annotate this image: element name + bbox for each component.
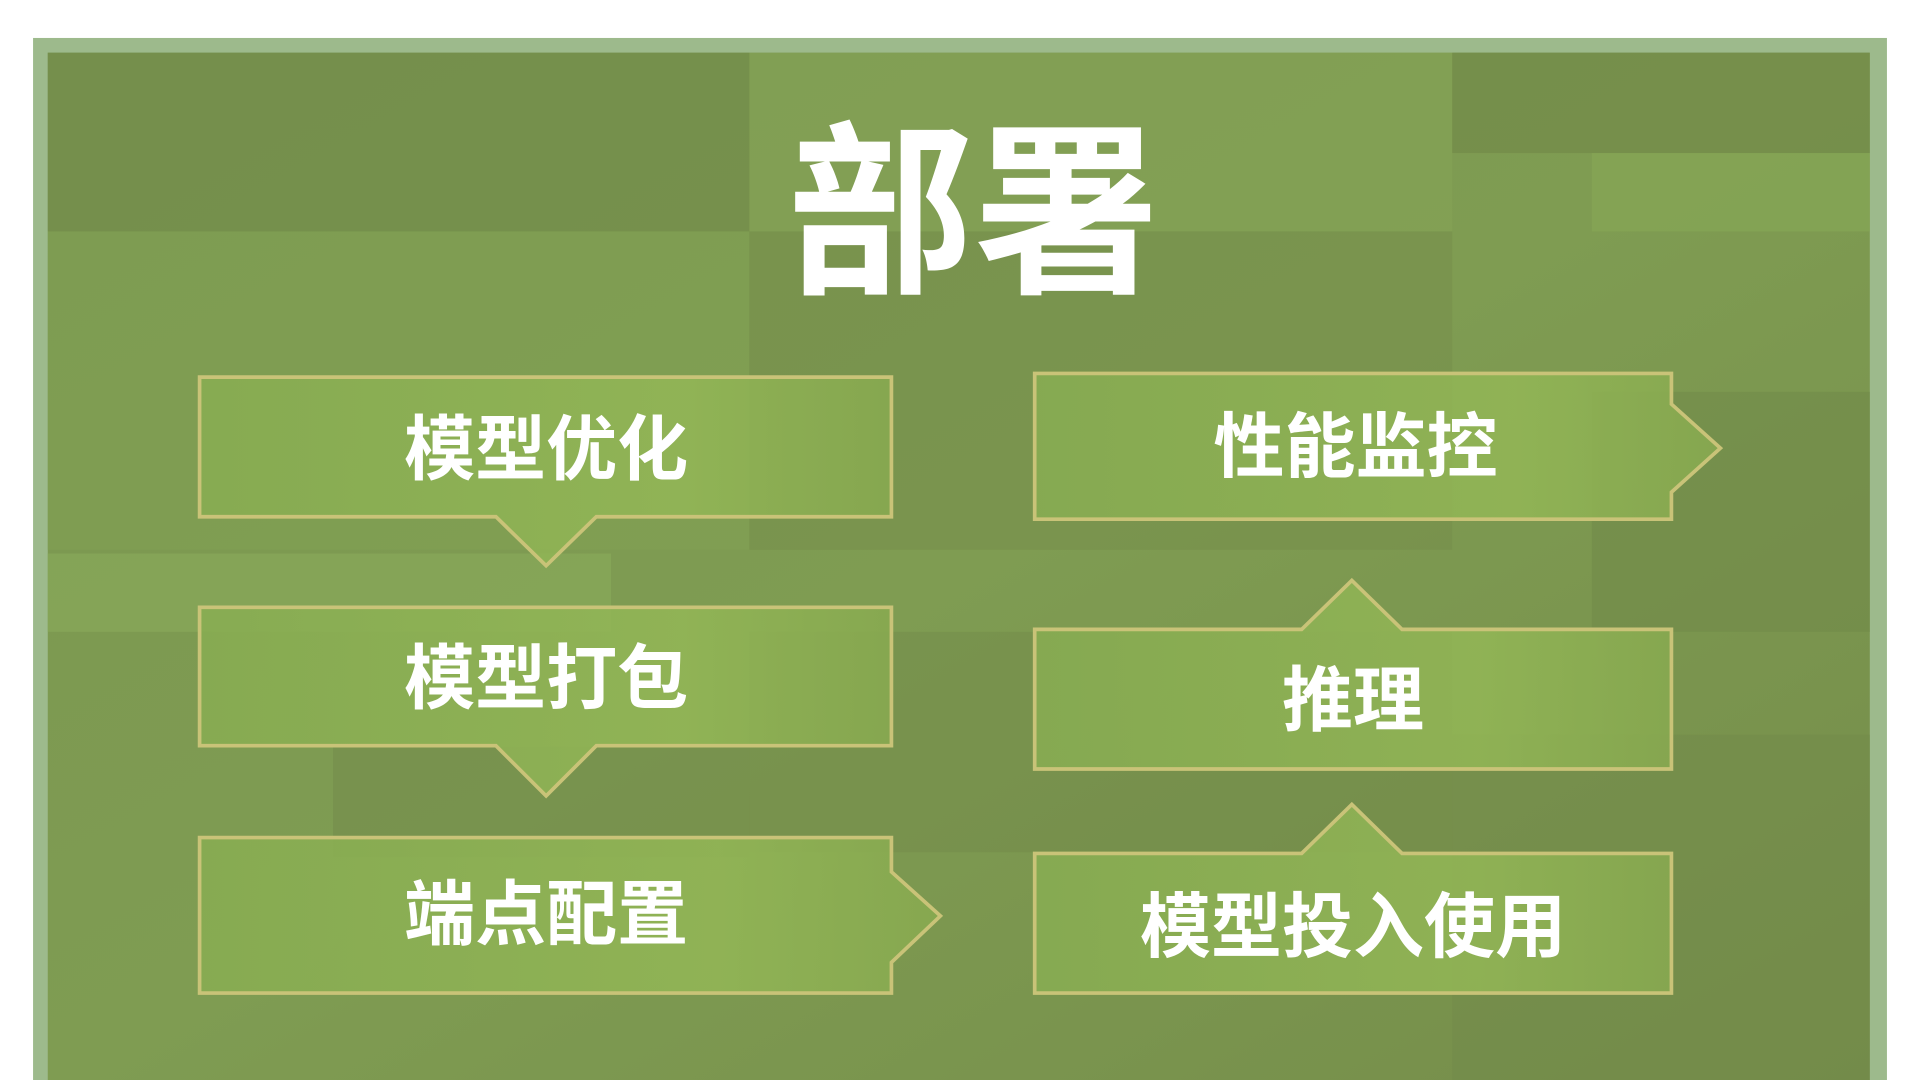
box: 模型打包 with down arrow [200,607,891,796]
box: 模型投入使用 with up arrow: 模型投入使用 [1140,888,1566,967]
box: 模型优化 with down arrow [200,377,891,566]
title: 部署 [787,112,1160,319]
box: 模型投入使用 with up arrow [1035,804,1671,993]
box: 性能监控 with right arrow: 性能监控 [1213,408,1498,487]
box: 模型优化 with down arrow: 模型优化 [404,411,688,490]
box: 推理 with up arrow: 推理 [1282,662,1424,741]
box: 性能监控 with right arrow [1035,373,1720,519]
box: 端点配置 with right arrow [200,838,940,993]
box: 端点配置 with right arrow: 端点配置 [404,876,688,955]
box: 模型打包 with down arrow: 模型打包 [404,640,688,719]
box: 推理 with up arrow [1035,580,1671,769]
